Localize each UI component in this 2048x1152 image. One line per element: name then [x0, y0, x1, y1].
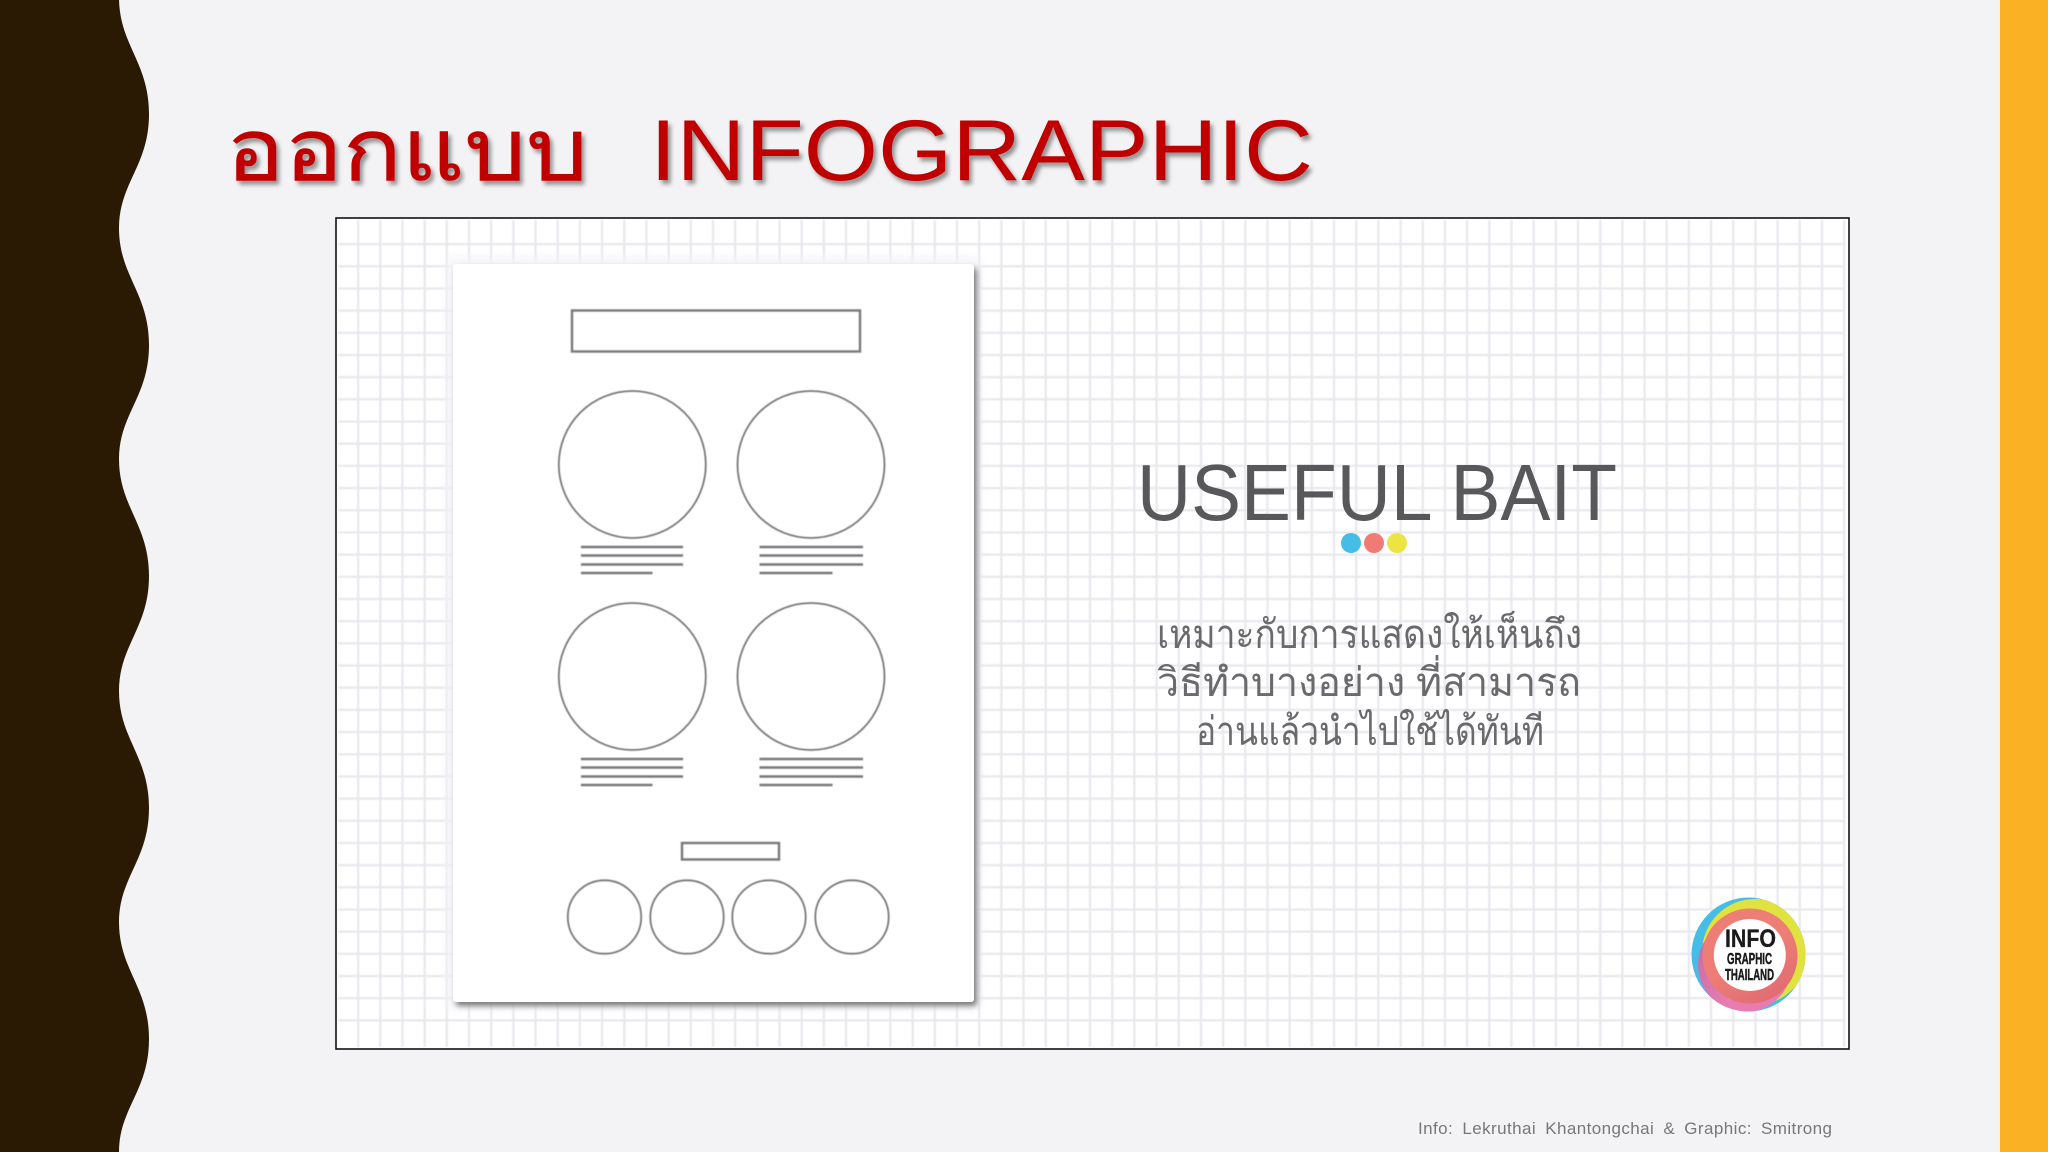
- title: INFOGRAPHIC: [650, 103, 1313, 199]
- text lines bottom right: [760, 759, 863, 785]
- circle bottom left: [559, 603, 706, 750]
- paper soft halo: [447, 258, 980, 1008]
- logo: infographic thailand: GRAPHIC: [1727, 951, 1772, 968]
- description text: อ่านแล้วนำไปใช้ได้ทันที: [1196, 708, 1544, 754]
- logo: infographic thailand: [1692, 898, 1808, 1012]
- subheading box: [682, 843, 779, 860]
- three coloured dots: [1341, 533, 1407, 553]
- description text: วิธีทำบางอย่าง ที่สามารถ: [1157, 655, 1581, 705]
- circle top right: [738, 391, 884, 538]
- small circle 2: [650, 880, 724, 954]
- description text: เหมาะกับการแสดงให้เห็นถึง: [1157, 610, 1582, 657]
- panel background with grid: [336, 218, 1849, 1049]
- logo: infographic thailand: INFO: [1725, 925, 1776, 953]
- description text: [1157, 610, 1582, 754]
- circle bottom right: [738, 603, 884, 750]
- text lines bottom left: [581, 759, 683, 785]
- footer credit: Info: Lekruthai Khantongchai & Graphic: Smitrong: [1418, 1119, 1832, 1138]
- panel: useful bait template: [336, 218, 1849, 1049]
- right orange band: [2000, 0, 2048, 1152]
- title: [226, 103, 1313, 199]
- small circle 4: [815, 880, 889, 954]
- title: ออกแบบ: [226, 103, 588, 199]
- paper sheet: [453, 264, 974, 1002]
- small circle 3: [732, 880, 806, 954]
- paper layout sketch: [447, 258, 980, 1008]
- small circle 1: [568, 880, 641, 954]
- text lines top right: [760, 547, 863, 573]
- heading: useful bait: USEFUL BAIT: [1137, 448, 1617, 537]
- sketch outlines: [559, 310, 889, 954]
- logo: infographic thailand: THAILAND: [1725, 967, 1774, 984]
- circle top left: [559, 391, 706, 538]
- text lines top left: [581, 547, 683, 573]
- left wavy dark brown band: [0, 0, 149, 1152]
- title box: [572, 310, 860, 352]
